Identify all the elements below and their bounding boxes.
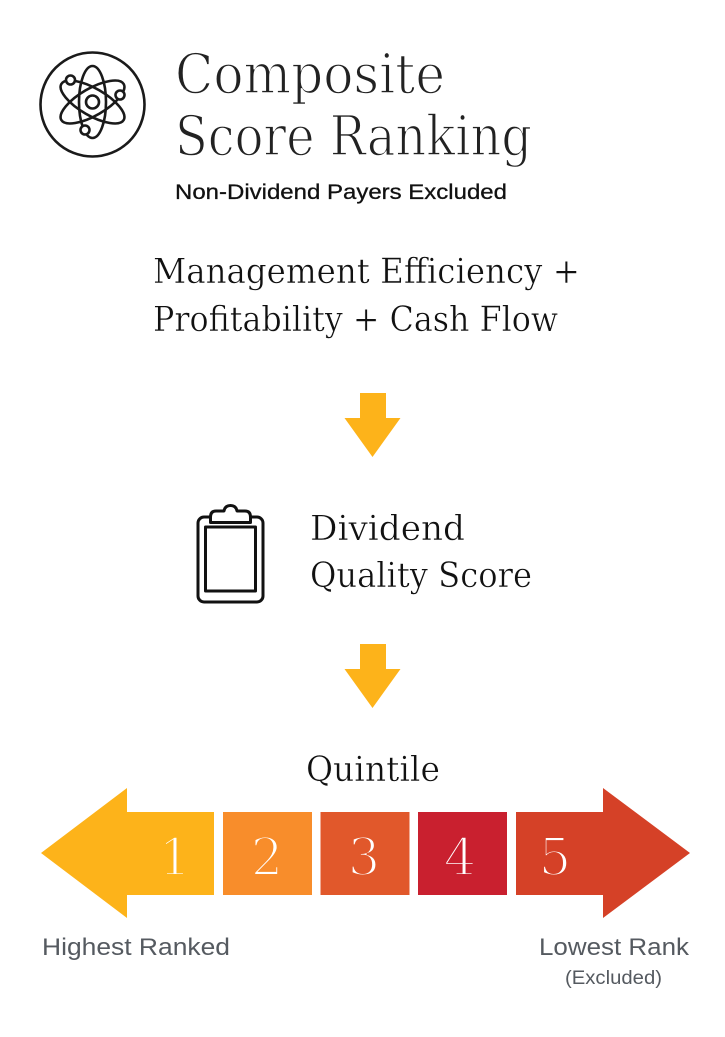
quintile 2 box [223, 812, 312, 895]
text block: dividend quality score: Quality Score [310, 556, 532, 596]
text block: score components: Profitability + Cash Flow [153, 300, 558, 340]
quintile 5 arrow: 5 [539, 829, 571, 888]
text block: dividend quality score: Dividend [310, 509, 465, 549]
quintile 4 box: 4 [444, 829, 476, 888]
quintile 5 arrow [516, 788, 690, 918]
quintile 3 box [320, 812, 410, 895]
arrow: down to quintile [344, 644, 400, 708]
icon: atom in circle [40, 52, 144, 156]
quintile 1 arrow: 1 [159, 829, 191, 888]
quintile scale [41, 788, 690, 918]
title: Score Ranking [175, 104, 532, 168]
label: highest ranked: Highest Ranked [42, 934, 230, 961]
quintile 2 box: 2 [251, 829, 283, 888]
title [175, 42, 532, 168]
arrow: down to dividend quality score [344, 393, 400, 457]
quintile 3 box: 3 [348, 829, 380, 888]
text block: dividend quality score [310, 509, 532, 596]
text block: score components: Management Efficiency + [153, 252, 580, 292]
text block: score components [153, 252, 580, 340]
title: Composite [175, 42, 445, 106]
label: lowest rank [539, 934, 690, 989]
label: lowest rank: (Excluded) [565, 968, 662, 989]
quintile 4 box [418, 812, 507, 895]
label: lowest rank: Lowest Rank [539, 934, 690, 961]
quintile 1 arrow [41, 788, 214, 918]
subtitle: Non-Dividend Payers Excluded [175, 181, 507, 204]
heading: quintile: Quintile [306, 750, 440, 790]
icon: clipboard [198, 506, 263, 602]
